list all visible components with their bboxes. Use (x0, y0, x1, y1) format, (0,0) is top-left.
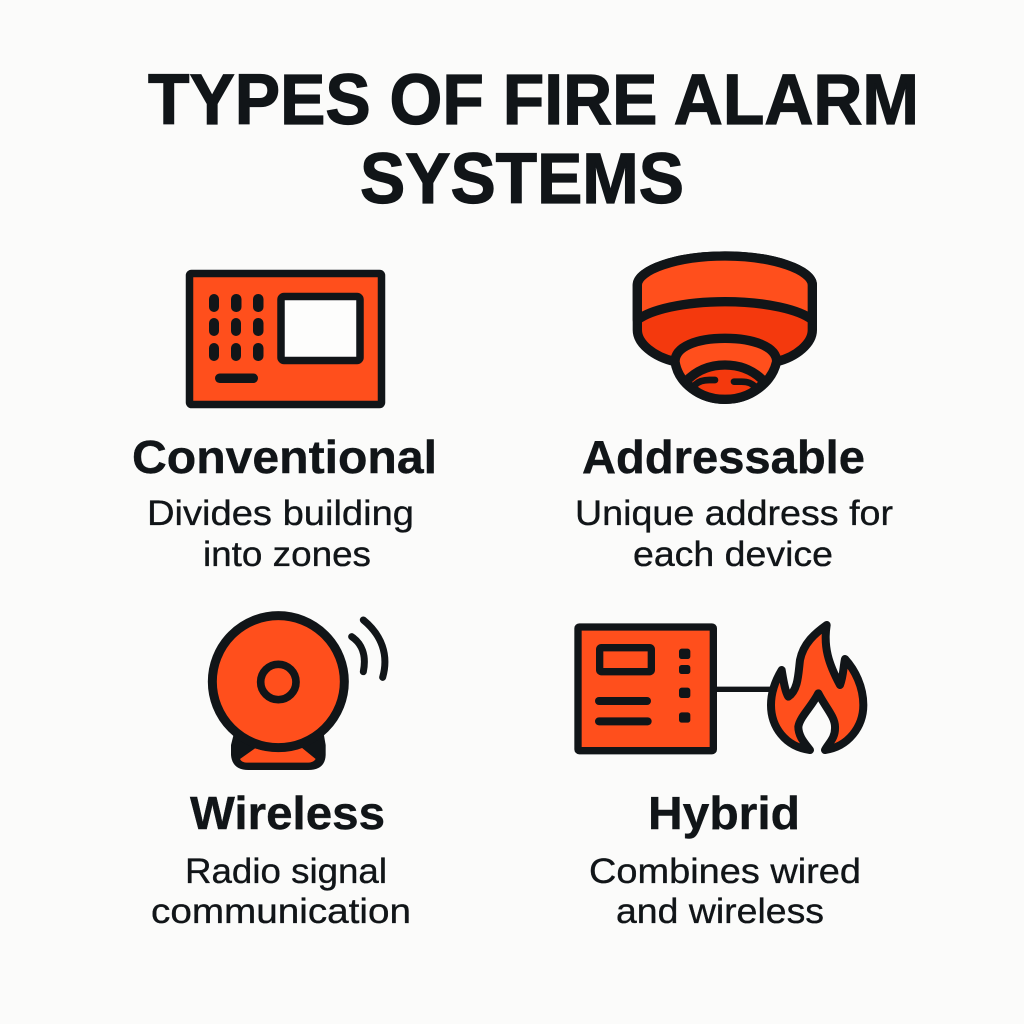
description: hybrid: and wireless (616, 892, 824, 931)
heading: hybrid: Hybrid (648, 787, 800, 839)
description: wireless: communication (151, 892, 411, 931)
description: conventional: into zones (203, 535, 371, 574)
heading: addressable: Addressable (582, 431, 865, 483)
description: addressable (575, 494, 893, 574)
title (148, 61, 919, 219)
description: wireless (151, 852, 411, 931)
description: hybrid: Combines wired (589, 852, 861, 891)
heading: conventional: Conventional (132, 431, 437, 483)
description: addressable: each device (633, 535, 833, 574)
description: addressable: Unique address for (575, 494, 893, 533)
panel: wireless (151, 616, 411, 931)
panel: hybrid (578, 625, 863, 931)
icon: control panel (190, 274, 382, 404)
title: SYSTEMS (360, 140, 684, 219)
description: conventional: Divides building (147, 494, 414, 533)
panel: addressable (575, 256, 893, 574)
icon: ceiling detector (637, 256, 812, 399)
description: wireless: Radio signal (185, 852, 387, 891)
title: TYPES OF FIRE ALARM (148, 61, 919, 140)
panel: conventional (132, 274, 437, 574)
description: conventional (147, 494, 414, 574)
icon: wireless bell (212, 616, 385, 770)
description: hybrid (589, 852, 861, 931)
icon: panel connected to flame (578, 625, 863, 751)
heading: wireless: Wireless (190, 787, 385, 839)
